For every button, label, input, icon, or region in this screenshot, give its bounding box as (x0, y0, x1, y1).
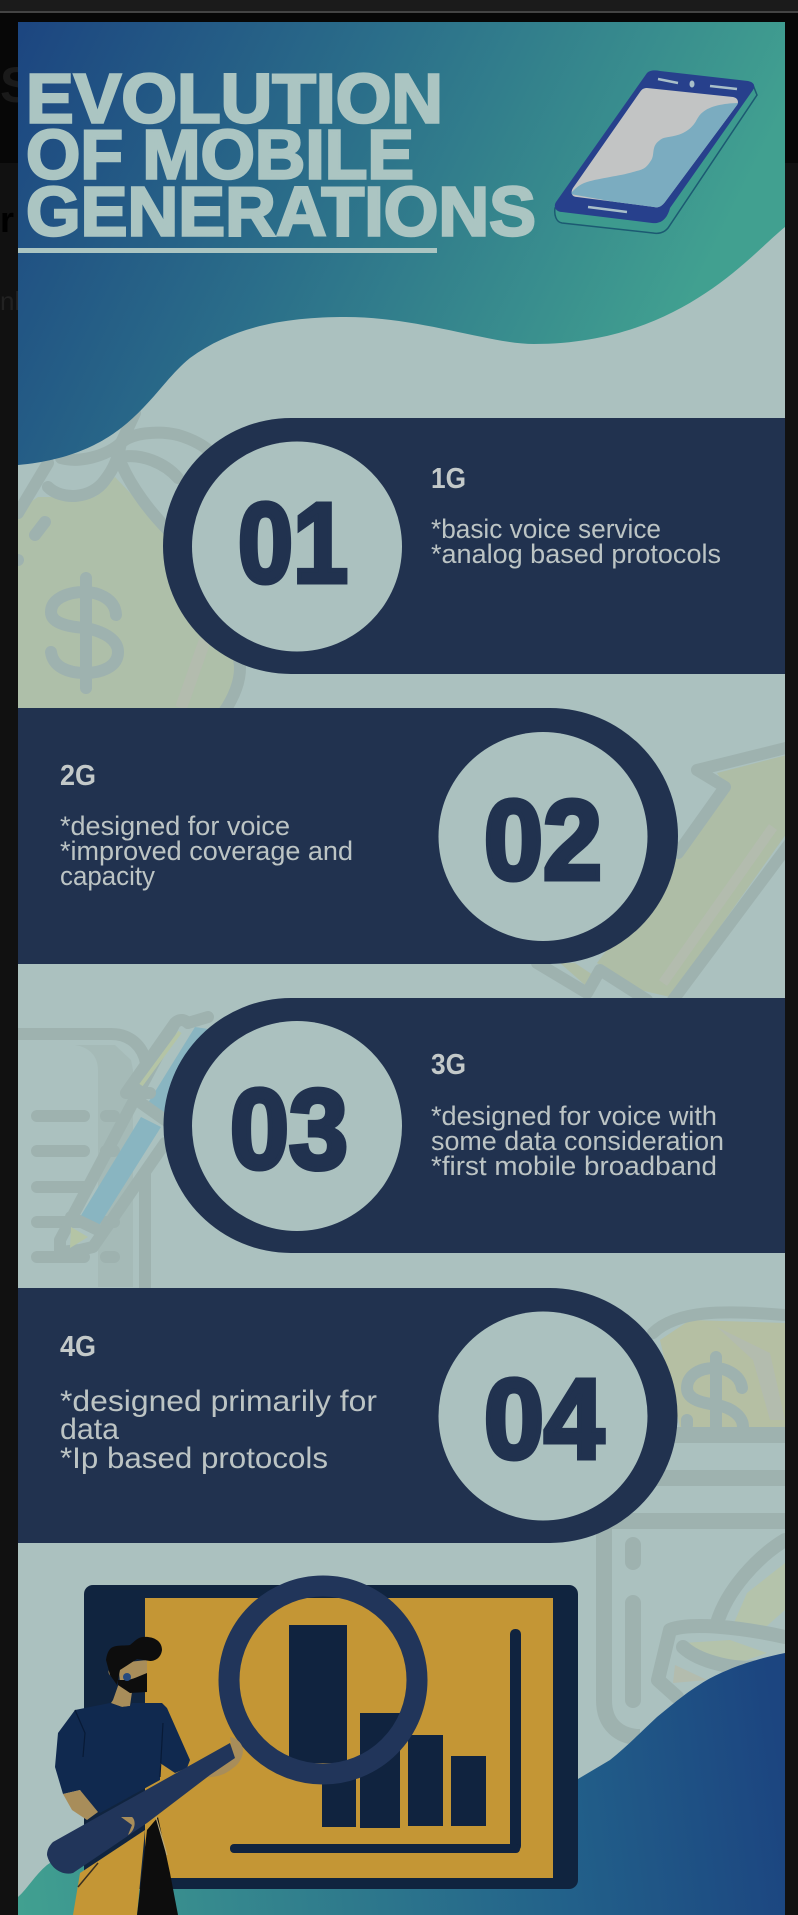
panel: 1G: 01 (238, 480, 348, 606)
icon: magnifier handle (47, 1743, 235, 1874)
panel: 4G: *Ip based protocols (60, 1442, 328, 1475)
panel: 4G (18, 1288, 678, 1543)
panel: 3G: 03 (230, 1066, 348, 1192)
icon: coin and wallet with plant (600, 1312, 785, 1737)
panel: 4G: *designed primarily for (60, 1385, 377, 1418)
icon: notepad and pencil (18, 1017, 215, 1287)
browser backdrop: S (0, 57, 33, 113)
panel: 1G (163, 418, 785, 674)
panel: 3G: some data consideration (431, 1126, 724, 1156)
icon: rising arrow (537, 747, 790, 1000)
title: EVOLUTION (26, 60, 443, 138)
title: OF MOBILE (26, 116, 414, 194)
panel: 2G: 2G (60, 760, 96, 792)
title (26, 60, 536, 250)
panel: 3G: *designed for voice with (431, 1101, 717, 1131)
icon: money bag (12, 413, 240, 712)
panel: 3G: *first mobile broadband (431, 1151, 717, 1181)
title: GENERATIONS (26, 172, 536, 250)
bottom gradient wave (18, 1653, 785, 1915)
browser backdrop: r (0, 199, 14, 240)
panel: 1G: 1G (431, 463, 466, 495)
icon: magnifying glass ring (229, 1586, 417, 1774)
bar chart (230, 1625, 521, 1853)
panel: 2G: 02 (484, 777, 602, 903)
panel: 1G: *basic voice service (431, 514, 661, 544)
panel: 3G (164, 998, 785, 1253)
icon: magnifier hand (203, 1737, 243, 1777)
title underline (18, 248, 437, 253)
panel: 4G: 4G (60, 1331, 96, 1363)
panel: 2G: *improved coverage and (60, 836, 353, 866)
browser backdrop: nl (0, 286, 20, 316)
panel: 2G: capacity (60, 861, 155, 891)
panel: 4G: 04 (484, 1356, 604, 1482)
illustration: chart on a screen (84, 1585, 578, 1889)
panel: 4G: data (60, 1413, 119, 1446)
illustration: man holding magnifier (47, 1637, 243, 1915)
panel: 1G: *analog based protocols (431, 539, 721, 569)
panel: 3G: 3G (431, 1049, 466, 1081)
icon: smartphone (555, 70, 757, 233)
panel: 2G: *designed for voice (60, 811, 290, 841)
panel: 2G (18, 708, 678, 964)
background icons (12, 413, 790, 1737)
top gradient wave (18, 22, 785, 465)
